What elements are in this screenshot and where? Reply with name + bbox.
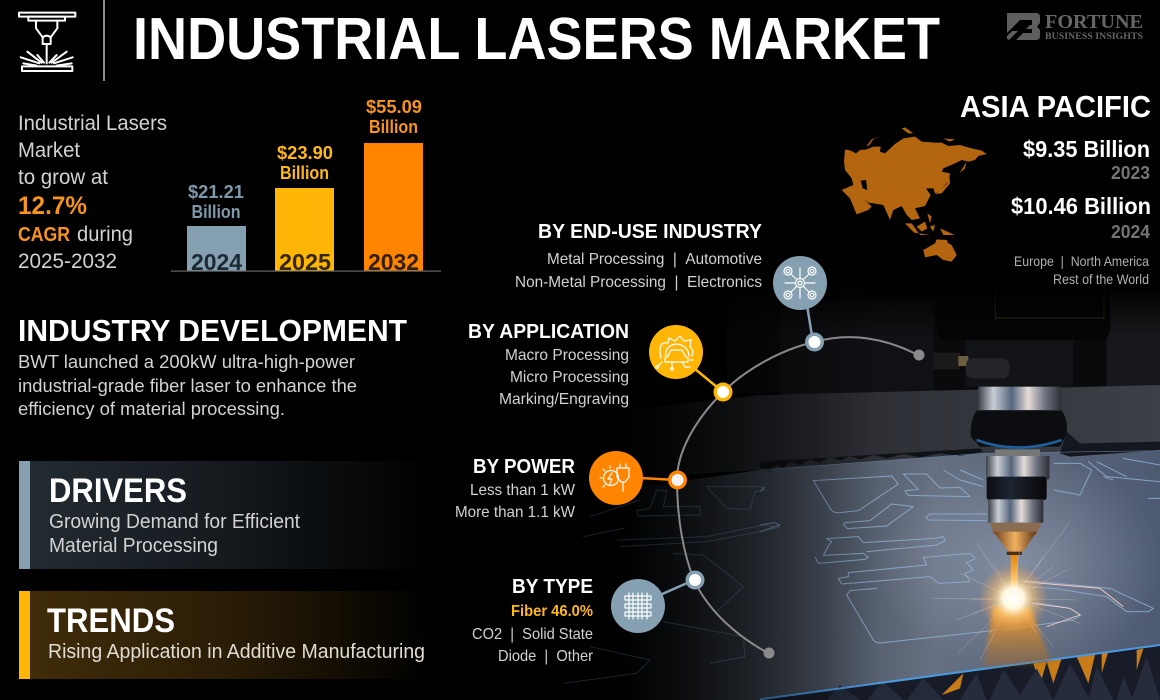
segment: by end-use industry: BY END-USE INDUSTRY bbox=[538, 221, 763, 243]
bar 2025 bbox=[275, 142, 334, 275]
panel: drivers: DRIVERS bbox=[49, 472, 187, 510]
segment: by end-use industry: Metal Processing | Automotive bbox=[547, 251, 762, 268]
segment: by application bbox=[468, 321, 732, 408]
icon: woven fabric bbox=[625, 593, 651, 619]
icon: plug and bolt bbox=[600, 464, 629, 491]
photo: laser cutting head over metal sheet bbox=[440, 0, 1160, 700]
bar 2024: $21.21 bbox=[188, 181, 244, 202]
segmentation arc bbox=[677, 337, 924, 658]
bar 2025: $23.90 bbox=[277, 142, 333, 163]
segment: by power: BY POWER bbox=[473, 456, 576, 478]
bar 2032: 2032 bbox=[368, 249, 419, 275]
segment: by end-use industry bbox=[515, 221, 827, 352]
logo: Fortune Business Insights bbox=[1007, 11, 1143, 42]
segment: by type: BY TYPE bbox=[512, 576, 593, 598]
bar 2024 bbox=[187, 181, 246, 275]
segment: by power: Less than 1 kW bbox=[470, 482, 576, 499]
bar 2024: 2024 bbox=[191, 249, 242, 275]
region: Asia Pacific stats: 2024 bbox=[1111, 222, 1150, 242]
CAGR text block: CAGR bbox=[18, 224, 70, 246]
industry development: BWT launched a 200kW ultra-high-power bbox=[18, 352, 355, 372]
industry development: industrial-grade fiber laser to enhance the bbox=[18, 376, 357, 396]
panel: drivers: Growing Demand for Efficient bbox=[49, 510, 300, 533]
segment: by end-use industry: Non-Metal Processing | Electronics bbox=[515, 274, 762, 291]
panel: drivers: Material Processing bbox=[49, 534, 218, 557]
segment: by type: Fiber 46.0% bbox=[511, 603, 593, 620]
bar 2032 bbox=[364, 96, 423, 275]
map: Asia Pacific bbox=[842, 127, 987, 262]
panel: trends bbox=[19, 591, 430, 679]
segment: by application: Micro Processing bbox=[510, 369, 629, 386]
panel: trends: TRENDS bbox=[47, 602, 175, 640]
segment: by type bbox=[472, 570, 704, 665]
region: Asia Pacific stats bbox=[960, 89, 1151, 287]
logo: Fortune Business Insights: BUSINESS INSIGHTS bbox=[1045, 32, 1143, 42]
region: Asia Pacific stats: Rest of the World bbox=[1053, 271, 1149, 287]
segment: by application: BY APPLICATION bbox=[468, 321, 629, 343]
CAGR text block: during bbox=[77, 223, 133, 246]
icon: gear with car bbox=[656, 336, 693, 370]
CAGR text block: 12.7% bbox=[18, 192, 87, 220]
region: Asia Pacific stats: $10.46 Billion bbox=[1011, 193, 1151, 219]
bar chart: market size bbox=[171, 96, 441, 275]
header divider bbox=[103, 0, 105, 81]
CAGR text block: to grow at bbox=[18, 166, 108, 189]
bar 2032: Billion bbox=[369, 116, 418, 137]
CAGR text block: Industrial Lasers bbox=[18, 112, 167, 135]
industry development: INDUSTRY DEVELOPMENT bbox=[18, 313, 407, 348]
industry development: efficiency of material processing. bbox=[18, 399, 285, 419]
segment: by power: More than 1.1 kW bbox=[455, 504, 576, 521]
bar 2025: Billion bbox=[280, 162, 329, 183]
icon: gears network bbox=[784, 267, 816, 299]
region: Asia Pacific stats: 2023 bbox=[1111, 163, 1150, 183]
CAGR text block: Market bbox=[18, 139, 80, 162]
bar 2024: Billion bbox=[192, 201, 240, 222]
panel: drivers bbox=[19, 461, 430, 569]
segment: by power bbox=[455, 451, 687, 521]
CAGR text block bbox=[18, 112, 167, 273]
industry development bbox=[18, 313, 407, 419]
panel: trends: Rising Application in Additive Manufacturing bbox=[48, 640, 425, 663]
header icon: laser cutter bbox=[19, 13, 75, 71]
title: INDUSTRIAL LASERS MARKET bbox=[133, 6, 940, 72]
segment: by application: Macro Processing bbox=[505, 347, 629, 364]
region: Asia Pacific stats: ASIA PACIFIC bbox=[960, 89, 1151, 124]
CAGR text block: 2025-2032 bbox=[18, 250, 117, 273]
bar 2025: 2025 bbox=[279, 249, 331, 275]
region: Asia Pacific stats: $9.35 Billion bbox=[1023, 136, 1150, 162]
segment: by type: CO2 | Solid State bbox=[472, 626, 593, 643]
cutting head body bbox=[933, 273, 1110, 555]
logo: Fortune Business Insights: FORTUNE bbox=[1045, 11, 1143, 33]
segment: by application: Marking/Engraving bbox=[499, 391, 629, 408]
laser beam and sparks bbox=[933, 522, 1123, 667]
bar 2032: $55.09 bbox=[366, 96, 422, 117]
segment: by type: Diode | Other bbox=[498, 648, 594, 665]
